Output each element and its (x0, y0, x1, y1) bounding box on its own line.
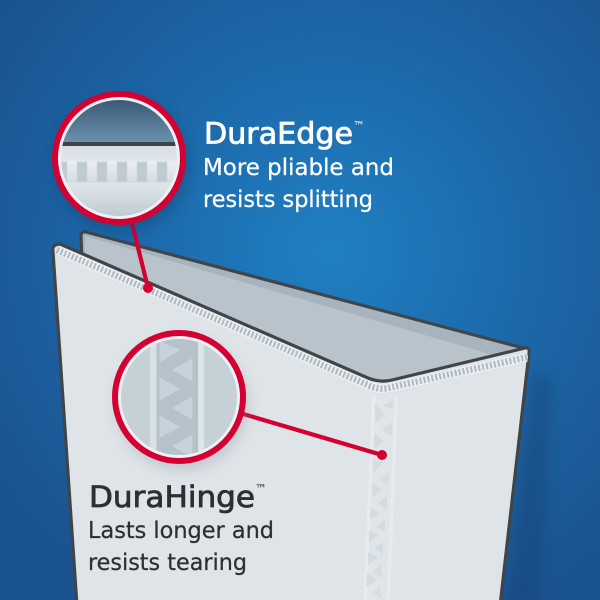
DuraHinge text (88, 480, 274, 576)
connector line: DuraHinge (240, 413, 387, 460)
magnifier: edge detail (55, 94, 183, 222)
binder illustration (53, 232, 552, 600)
front panel (53, 244, 529, 600)
DuraHinge text: ™ (255, 482, 267, 496)
circle shadow (56, 98, 188, 230)
back panel (81, 232, 527, 381)
DuraEdge text: resists splitting (203, 185, 373, 213)
hinge triangles (366, 401, 393, 598)
circle shadow (116, 338, 248, 470)
magnifier: hinge detail (115, 333, 243, 461)
DuraHinge text: Lasts longer and (88, 516, 274, 544)
DuraHinge text: DuraHinge (89, 480, 255, 514)
DuraEdge stitched edge (57, 250, 528, 389)
DuraHinge callout (115, 333, 387, 470)
DuraEdge text (203, 116, 394, 213)
connector line: DuraEdge (130, 215, 153, 293)
DuraEdge text: More pliable and (203, 153, 394, 181)
DuraHinge text: resists tearing (88, 548, 247, 576)
DuraEdge text: ™ (353, 119, 365, 133)
inner back surface (85, 236, 497, 381)
DuraEdge text: DuraEdge (204, 116, 353, 150)
binder shadow (508, 370, 552, 600)
DuraEdge callout (55, 94, 188, 293)
DuraHinge band (363, 395, 398, 600)
